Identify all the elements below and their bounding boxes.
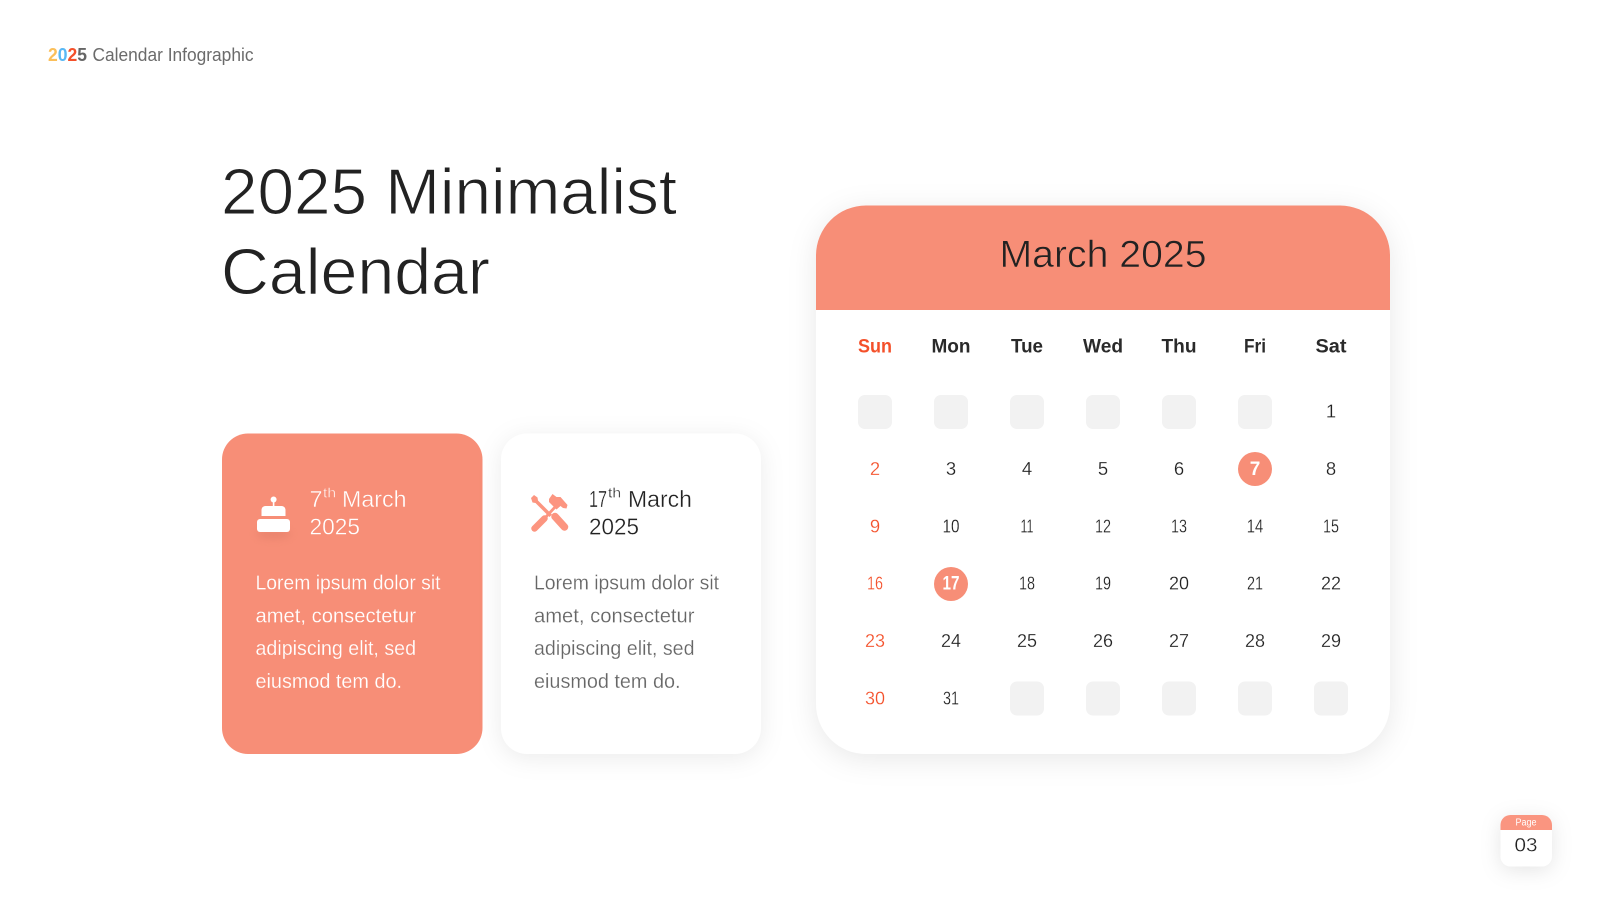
day numbers: 19 bbox=[1095, 573, 1111, 594]
highlighted day 7: 7 bbox=[1250, 459, 1260, 480]
body text: adipiscing elit, sed bbox=[256, 638, 416, 660]
header label: 2025 bbox=[48, 45, 87, 65]
day numbers: 23 bbox=[865, 630, 885, 651]
panel: March 2025 calendar bbox=[816, 206, 1390, 754]
calendar header: March 2025 bbox=[1000, 234, 1206, 276]
date heading bbox=[310, 484, 406, 539]
day numbers: 15 bbox=[1323, 515, 1339, 536]
day numbers: 26 bbox=[1093, 630, 1113, 651]
header label: Calendar Infographic bbox=[92, 45, 254, 65]
weekday labels: Tue bbox=[1011, 336, 1043, 358]
day numbers: 16 bbox=[867, 573, 883, 594]
day numbers: 28 bbox=[1245, 630, 1265, 651]
day numbers: 2 bbox=[870, 458, 880, 479]
body text: Lorem ipsum dolor sit bbox=[256, 572, 441, 594]
day numbers: 9 bbox=[870, 515, 880, 536]
day numbers: 31 bbox=[943, 687, 959, 708]
day numbers: 1 bbox=[1326, 401, 1336, 422]
weekday labels: Thu bbox=[1162, 336, 1196, 358]
day numbers: 10 bbox=[942, 515, 960, 536]
day numbers: 5 bbox=[1098, 458, 1108, 479]
date heading: 17 bbox=[589, 486, 607, 512]
calendar header bbox=[816, 206, 1390, 310]
weekday labels: Mon bbox=[932, 336, 970, 358]
title bbox=[221, 155, 677, 308]
day numbers: 3 bbox=[946, 458, 956, 479]
highlighted day 17: 17 bbox=[942, 574, 960, 595]
weekday labels: Sat bbox=[1316, 336, 1347, 358]
body text: amet, consectetur bbox=[534, 605, 695, 627]
page number badge: 03 bbox=[1514, 836, 1538, 856]
day numbers: 18 bbox=[1019, 573, 1035, 594]
date heading: 7 bbox=[310, 486, 323, 512]
body text bbox=[534, 572, 719, 693]
day numbers: 27 bbox=[1169, 630, 1189, 651]
day numbers: 21 bbox=[1247, 573, 1263, 594]
day numbers: 30 bbox=[865, 687, 885, 708]
body text: adipiscing elit, sed bbox=[534, 638, 694, 660]
day numbers: 14 bbox=[1247, 515, 1263, 536]
day numbers: 4 bbox=[1022, 458, 1032, 479]
date heading: 2025 bbox=[310, 513, 360, 539]
page number badge bbox=[1500, 815, 1552, 866]
day numbers: 22 bbox=[1321, 573, 1341, 594]
weekday labels: Sun bbox=[858, 336, 892, 358]
weekday labels: Fri bbox=[1244, 336, 1266, 358]
day numbers: 11 bbox=[1020, 515, 1034, 536]
date heading: 2025 bbox=[589, 513, 639, 539]
day numbers: 8 bbox=[1326, 458, 1336, 479]
body text: amet, consectetur bbox=[256, 605, 416, 627]
title: Calendar bbox=[221, 235, 490, 308]
day numbers: 20 bbox=[1169, 573, 1189, 594]
day numbers: 25 bbox=[1017, 630, 1037, 651]
day numbers: 6 bbox=[1174, 458, 1184, 479]
title: 2025 Minimalist bbox=[221, 155, 677, 228]
date heading: th bbox=[608, 484, 621, 500]
day numbers: 13 bbox=[1171, 515, 1187, 536]
empty day cells bbox=[858, 395, 1348, 716]
day numbers: 24 bbox=[941, 630, 961, 651]
day numbers bbox=[865, 401, 1341, 708]
weekday labels: Wed bbox=[1083, 336, 1123, 358]
body text: Lorem ipsum dolor sit bbox=[534, 572, 719, 594]
day numbers: 12 bbox=[1095, 515, 1111, 536]
weekday labels bbox=[858, 336, 1347, 358]
day numbers: 29 bbox=[1321, 630, 1341, 651]
panel: 17th March event card bbox=[501, 434, 761, 754]
body text: eiusmod tem do. bbox=[256, 671, 402, 693]
date heading bbox=[589, 484, 692, 539]
icon: birthday cake bbox=[256, 496, 292, 539]
panel: 7th March event card bbox=[222, 434, 482, 754]
date heading: th bbox=[323, 484, 336, 500]
date heading: March bbox=[342, 486, 406, 512]
icon: crossed hammer and screwdriver bbox=[531, 494, 568, 528]
date heading: March bbox=[628, 486, 692, 512]
highlighted day 17 bbox=[934, 567, 968, 601]
page number badge: Page bbox=[1516, 818, 1537, 828]
body text bbox=[256, 572, 441, 693]
highlighted day 7 bbox=[1238, 452, 1272, 486]
body text: eiusmod tem do. bbox=[534, 671, 680, 693]
